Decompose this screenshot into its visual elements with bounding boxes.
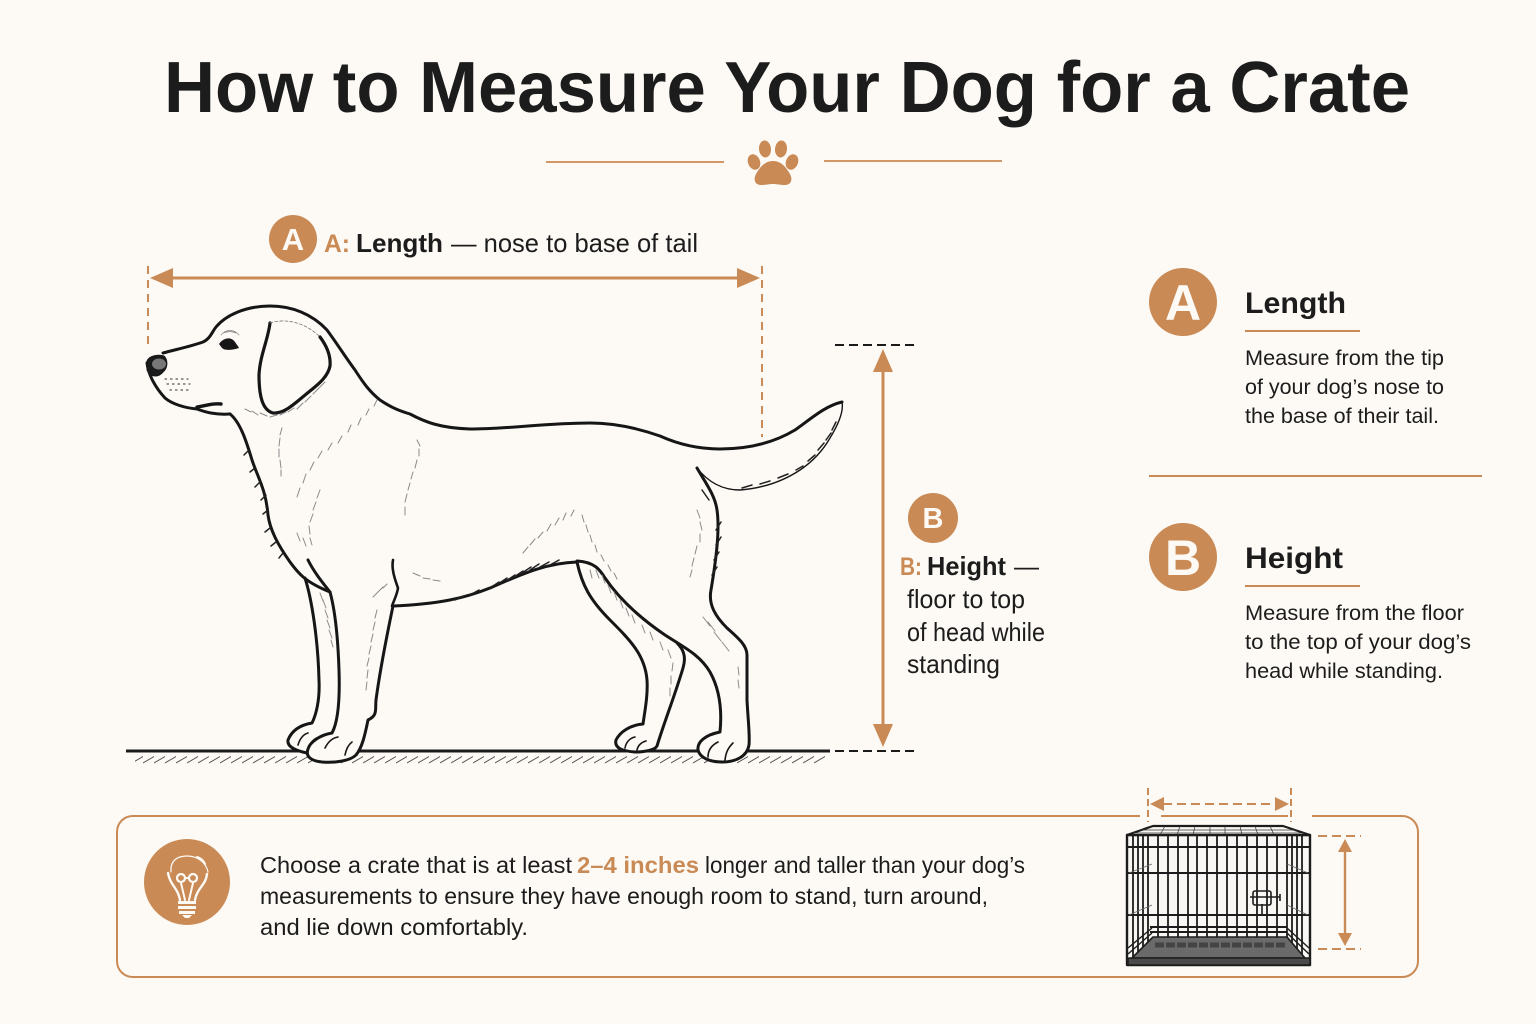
panel: length: Length — [1245, 287, 1346, 320]
length label: — nose to base of tail — [451, 228, 698, 258]
tail underside — [697, 402, 842, 490]
crate latch — [1250, 891, 1280, 915]
muzzle and jaw — [147, 363, 230, 414]
length label: A: — [324, 230, 350, 258]
panel: height: Measure from the floor — [1245, 602, 1464, 625]
icon: light bulb — [144, 839, 230, 925]
belly — [393, 562, 577, 606]
title: How to Measure Your Dog for a Crate — [164, 48, 1410, 128]
panel: height: B — [1165, 530, 1201, 586]
crate dimension arrows — [1148, 788, 1361, 949]
length label: A — [282, 222, 304, 257]
icon: paw — [745, 140, 801, 185]
nose — [147, 355, 167, 376]
length arrow — [148, 266, 762, 437]
panel: length: of your dog’s nose to — [1245, 376, 1444, 399]
paw divider — [546, 140, 1002, 185]
height label: Height — [927, 551, 1006, 581]
tip text: Choose a crate that is at least — [260, 852, 573, 878]
panel: height — [1149, 523, 1471, 683]
fur hatching — [245, 382, 739, 696]
whisker dots — [165, 379, 190, 390]
panel: height: head while standing. — [1245, 660, 1443, 683]
tip text: and lie down comfortably. — [260, 914, 528, 940]
chest — [230, 414, 330, 592]
eye — [219, 330, 239, 350]
ear — [259, 323, 330, 413]
panel: length — [1149, 268, 1444, 428]
near front leg — [307, 592, 393, 762]
tip text — [260, 852, 1025, 940]
panel: length: the base of their tail. — [1245, 405, 1439, 428]
height label: standing — [907, 649, 1000, 679]
height label: floor to top — [907, 584, 1025, 614]
tip text: 2–4 inches — [577, 852, 699, 878]
height arrow — [835, 345, 918, 751]
panel: height: to the top of your dog’s — [1245, 631, 1471, 654]
tip text: longer and taller than your dog’s — [705, 852, 1025, 878]
far front leg — [288, 578, 319, 753]
mouth — [197, 404, 221, 407]
dog illustration — [147, 306, 842, 762]
back and tail — [163, 306, 842, 449]
panel: length: Measure from the tip — [1245, 347, 1444, 370]
panel: height: Height — [1245, 542, 1343, 575]
height label: — — [1014, 551, 1039, 581]
height label: of head while — [907, 617, 1045, 647]
near hind leg — [577, 468, 749, 762]
elbow — [392, 560, 398, 606]
length label: Length — [356, 228, 443, 258]
crate tray — [1132, 937, 1305, 958]
height label: B: — [900, 553, 922, 581]
crate illustration — [1127, 826, 1310, 965]
crate bars — [1133, 835, 1302, 958]
outline fur ticks — [244, 422, 836, 600]
ground — [126, 751, 830, 764]
toes — [298, 733, 733, 760]
callout — [117, 816, 1418, 977]
length label — [269, 215, 698, 263]
panel: length: A — [1165, 275, 1201, 331]
far hind leg — [577, 562, 684, 752]
ear top — [270, 321, 320, 337]
tip text: measurements to ensure they have enough room to stand, turn around, — [260, 883, 988, 909]
height label: B — [923, 503, 943, 535]
height label — [900, 493, 1045, 679]
